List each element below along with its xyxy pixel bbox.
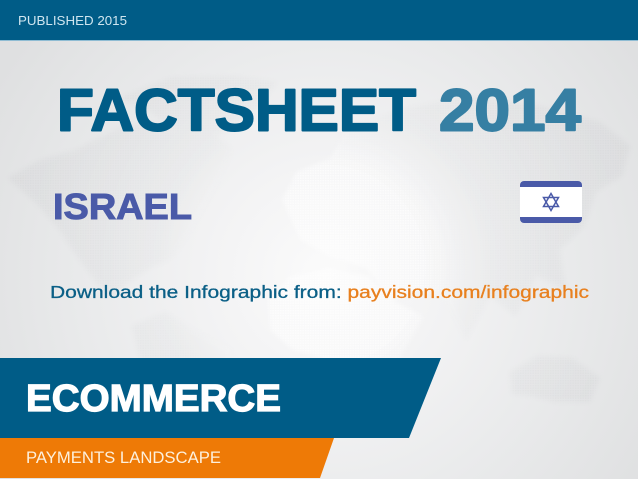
payments landscape banner	[0, 438, 334, 478]
download line: Download the Infographic from: payvision.com/infographic	[50, 282, 589, 302]
icon: Israeli flag	[520, 181, 582, 223]
Greenland	[130, 82, 196, 110]
South America	[142, 352, 143, 353]
title: 2014	[439, 78, 581, 144]
published label: PUBLISHED 2015	[18, 13, 127, 28]
title: FACTSHEET	[57, 78, 416, 144]
Africa	[268, 268, 424, 432]
Australia	[515, 360, 596, 400]
country name: ISRAEL	[53, 186, 192, 227]
North America	[12, 130, 146, 288]
ecommerce banner	[0, 358, 441, 438]
world map	[12, 82, 626, 400]
header bar	[0, 0, 638, 41]
banner subheading: PAYMENTS LANDSCAPE	[26, 449, 221, 467]
banner heading: ECOMMERCE	[26, 378, 281, 420]
Eurasia	[308, 103, 626, 283]
title	[57, 78, 581, 144]
